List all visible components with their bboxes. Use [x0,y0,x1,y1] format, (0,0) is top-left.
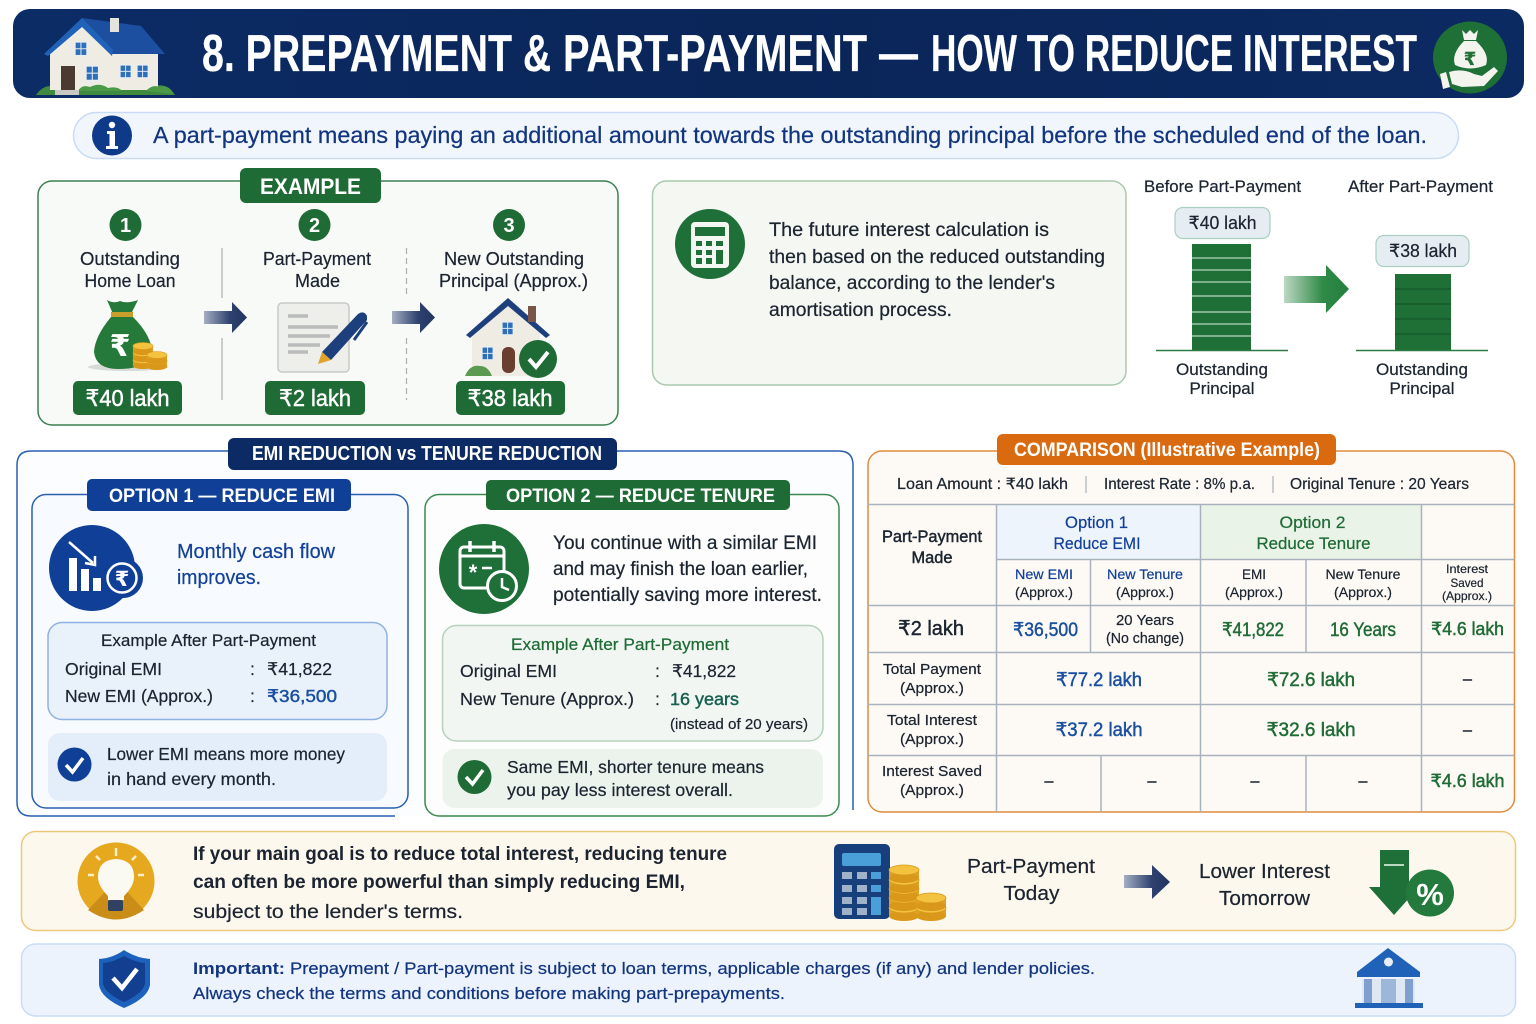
row: interest saved: – [1359,773,1368,790]
row: 2 lakh part-payment: ₹2 lakh [898,617,964,640]
column headers: Reduce EMI [1054,535,1140,553]
row: total payment: ₹77.2 lakh [1056,670,1142,691]
note text: then based on the reduced outstanding [769,247,1105,268]
takeaway: option 2 [442,749,823,808]
icon: calendar and clock: * [469,560,478,585]
row: total interest [887,713,1472,748]
title: PART-PAYMENT [563,25,867,83]
example box: option 1: ₹41,822 [267,659,332,679]
takeaway: option 2: Same EMI, shorter tenure means [507,757,764,777]
icon: money bag with coins: ₹ [110,330,130,363]
description: option 2 [553,533,822,606]
row: interest saved: (Approx.) [900,783,964,799]
info banner [74,112,1458,158]
row: total interest: ₹32.6 lakh [1266,720,1356,741]
description: option 2: and may finish the loan earlier, [553,559,808,580]
step 1: Outstanding [80,249,180,269]
icon: money bag in hand [1433,22,1507,94]
table [868,504,1514,812]
takeaway: option 2: you pay less interest overall. [507,780,733,800]
value: 38 lakh: ₹38 lakh [468,385,552,411]
step 1: 1 [120,215,131,237]
heading: option 1 [87,479,351,511]
icon: calculator and coins [834,844,946,921]
arrow [392,302,435,333]
example box: option 1: ₹36,500 [267,686,337,706]
example box: option 1: New EMI (Approx.) [65,686,213,706]
example box: option 2: 16 years [670,689,739,709]
column headers: (Approx.) [1442,589,1492,603]
column headers: (Approx.) [1334,584,1392,600]
column headers: Part-Payment [882,528,982,546]
panel: comparison table [868,434,1514,812]
icon: calendar and clock [439,524,529,614]
column headers: Interest [1446,562,1489,576]
value: 38 lakh [456,381,565,415]
flow: part-payment today: Part-Payment [967,856,1095,878]
icon: house [36,18,175,95]
column headers: (Approx.) [1116,584,1174,600]
header banner [13,9,1524,98]
chart: before part-payment stack [1144,178,1301,398]
example box: option 2: New Tenure (Approx.) [460,689,634,709]
key point: cash flow [177,541,336,589]
row: 2 lakh part-payment: (No change) [1106,631,1184,647]
row: interest saved: – [1045,773,1054,790]
panel: option 2 [425,480,839,816]
column headers: New Tenure [1326,566,1401,582]
loan assumptions: Interest Rate : 8% p.a. [1104,476,1255,493]
value: 40 lakh [73,381,182,415]
panel: future interest note [652,181,1126,385]
loan assumptions: Loan Amount : ₹40 lakh [897,476,1068,493]
note text: balance, according to the lender's [769,273,1055,294]
row: 2 lakh part-payment: 20 Years [1116,613,1174,629]
tip text [193,843,727,923]
heading: EMI vs tenure: EMI REDUCTION vs TENURE REDUCTION [252,443,602,465]
value label [1175,208,1270,238]
key point: cash flow: Monthly cash flow [177,541,336,563]
example box: option 1: Example After Part-Payment [101,632,316,650]
row: 2 lakh part-payment [898,613,1504,647]
example box: option 2: Example After Part-Payment [511,636,729,654]
column headers [882,514,1492,603]
arrow: before to after [1284,265,1349,313]
heading: comparison: COMPARISON (Illustrative Example) [1014,440,1320,461]
row: total interest: Total Interest [887,713,977,729]
example box: option 1: : [250,659,255,679]
icon: shield [99,950,150,1008]
chart: before part-payment stack: Principal [1190,380,1254,398]
example box: option 2: Original EMI [460,661,557,681]
takeaway: option 1: in hand every month. [107,769,276,789]
step 3: Principal (Approx.) [439,271,588,291]
row: total payment: Total Payment [883,662,981,678]
takeaway: option 1: Lower EMI means more money [107,744,345,764]
flow: part-payment today [967,856,1095,905]
icon: interest down [1369,850,1454,916]
heading: EMI vs tenure [228,438,617,470]
icon: interest down: % [1416,877,1444,912]
row: interest saved [882,764,1504,799]
heading: option 1: OPTION 1 — REDUCE EMI [109,486,335,507]
arrow [1124,865,1170,899]
note text: The future interest calculation is [769,220,1049,241]
key point: cash flow: improves. [177,567,261,589]
flow: lower interest tomorrow: Lower Interest [1199,861,1330,883]
step 1: Home Loan [84,271,176,291]
value label: ₹38 lakh [1389,241,1457,261]
example box: option 2: ₹41,822 [672,661,736,681]
tip text: can often be more powerful than simply reducing EMI, [193,871,685,893]
icon: bank [1355,948,1423,1008]
column headers: Option 2 [1280,514,1346,532]
flow: lower interest tomorrow [1199,861,1330,910]
icon: document and pen [278,303,367,372]
icon: falling EMI bars with rupee [49,525,143,611]
flow: lower interest tomorrow: Tomorrow [1219,888,1311,910]
step 2: Part-Payment [263,249,371,269]
row: total payment: (Approx.) [900,681,964,697]
title: 8. PREPAYMENT [202,25,512,83]
example box: option 2: (instead of 20 years) [670,716,808,733]
description: option 2: You continue with a similar EMI [553,533,817,554]
example box: option 2: : [655,689,660,709]
icon: light bulb [78,842,154,920]
row: interest saved: – [1148,773,1157,790]
description: option 2: potentially saving more interest. [553,585,822,606]
column headers: EMI [1242,566,1266,582]
note text: Prepayment / Part-payment is subject to loan terms, applicable charges (if any) and lender policies. [290,959,1095,978]
column headers: Saved [1450,576,1484,590]
loan assumptions [897,476,1469,493]
chart: before part-payment stack: Before Part-Payment [1144,178,1301,196]
note text [193,959,1095,1003]
column headers: Option 1 [1065,514,1128,532]
note text: Always check the terms and conditions before making part-prepayments. [193,984,785,1003]
icon: calculator [675,209,745,279]
info text: A part-payment means paying an additional amount towards the outstanding principal before the scheduled end of the loan. [153,122,1427,148]
panel: example [38,168,618,425]
tip text: subject to the lender's terms. [193,901,463,923]
icon: info [92,116,132,156]
title: — [879,25,918,83]
row: total payment: ₹72.6 lakh [1267,670,1355,691]
column headers: New Tenure [1107,566,1183,582]
column headers: Reduce Tenure [1256,535,1370,553]
example box: option 2 [442,626,823,741]
takeaway: option 1 [48,733,387,801]
example box: option 1: : [250,686,255,706]
example box: option 2: : [655,661,660,681]
chart: after part-payment stack [1348,178,1493,398]
row: interest saved: ₹4.6 lakh [1430,771,1504,791]
example box: option 1 [48,622,387,720]
panel: main tip [22,832,1516,930]
row: total interest: – [1463,722,1472,739]
chart: after part-payment stack: After Part-Payment [1348,178,1493,196]
title: & [523,25,551,83]
heading: example [240,168,381,203]
row: total payment: – [1463,671,1472,688]
row: total interest: ₹37.2 lakh [1056,720,1142,741]
column headers: New EMI [1015,566,1073,582]
column headers: (Approx.) [1225,584,1283,600]
step 3 [439,209,588,415]
step 3: New Outstanding [444,249,584,269]
row: total interest: (Approx.) [900,732,964,748]
row: interest saved: Interest Saved [882,764,982,780]
icon: money bag with coins [88,300,168,371]
step 3: 3 [503,215,515,237]
note text: amortisation process. [769,300,952,321]
chart: before part-payment stack: Outstanding [1176,361,1268,379]
tip text: If your main goal is to reduce total interest, reducing tenure [193,843,727,865]
loan assumptions: Original Tenure : 20 Years [1290,476,1469,493]
row: 2 lakh part-payment: ₹4.6 lakh [1431,619,1504,639]
panel: important note [22,944,1516,1016]
row: 2 lakh part-payment: ₹36,500 [1013,620,1078,641]
icon: house with check [465,298,557,378]
value: 2 lakh [265,381,365,415]
chart: after part-payment stack: Principal [1390,380,1454,398]
heading: option 2 [486,480,790,510]
arrow [204,302,247,333]
panel: option 1 [32,479,408,808]
step 2: 2 [309,215,320,237]
value label [1376,236,1469,266]
row: 2 lakh part-payment: 16 Years [1330,620,1396,641]
heading: option 2: OPTION 2 — REDUCE TENURE [506,486,775,507]
heading: comparison [997,434,1336,465]
value label: ₹40 lakh [1188,213,1256,233]
chart: after part-payment stack: Outstanding [1376,361,1468,379]
step 1 [73,209,182,415]
value: 40 lakh: ₹40 lakh [86,385,170,411]
row: 2 lakh part-payment: ₹41,822 [1222,620,1284,641]
heading: example: EXAMPLE [260,174,361,199]
example box: option 1: Original EMI [65,659,162,679]
note text: Important: [193,959,285,978]
icon: falling EMI bars with rupee: ₹ [115,568,129,591]
flow: part-payment today: Today [1004,883,1060,905]
column headers: (Approx.) [1015,584,1073,600]
note text [769,220,1105,321]
step 2 [263,209,371,415]
row: total payment [883,662,1472,697]
title [202,25,1417,83]
row: interest saved: – [1251,773,1260,790]
value: 2 lakh: ₹2 lakh [279,385,351,411]
column headers: Made [912,549,952,567]
icon: money bag in hand: ₹ [1464,49,1476,69]
step 2: Made [295,271,340,291]
panel: EMI vs tenure reduction [17,438,853,816]
